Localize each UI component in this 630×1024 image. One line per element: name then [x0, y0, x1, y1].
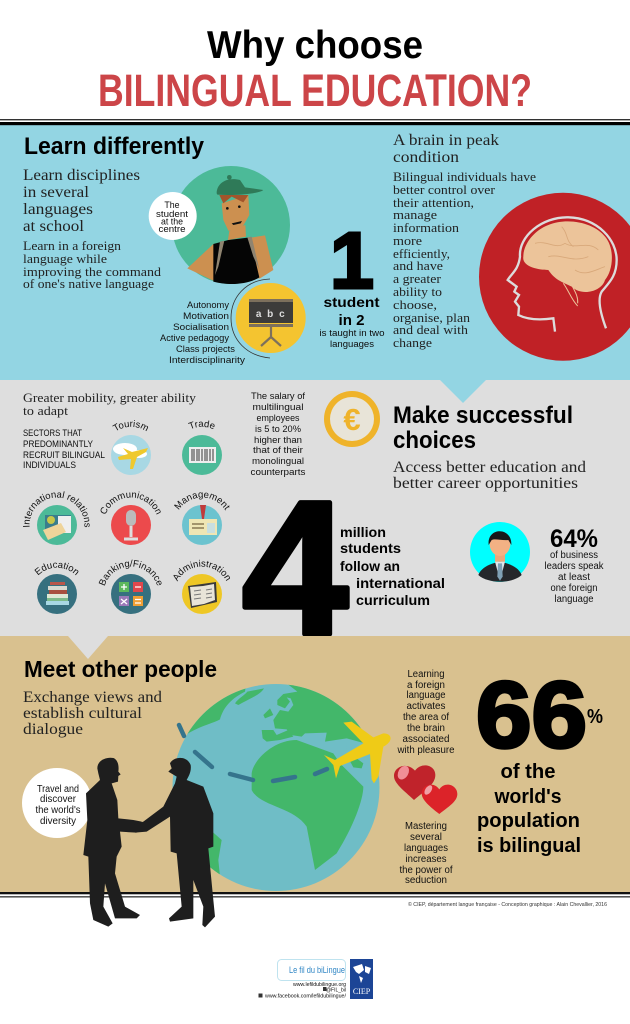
text block: salary: The salary of	[251, 391, 305, 402]
panel: learn differently	[0, 122, 630, 380]
logo: le fil du bilingue: Le fil du biLingue	[289, 965, 345, 975]
arrow: blue pointer	[440, 380, 486, 403]
text block: learn disciplines: at school	[23, 218, 84, 235]
text block: access better education: better career opportunities	[393, 475, 578, 492]
panel: make successful choices	[0, 380, 630, 675]
text block: brain in peak condition: choose,	[393, 297, 437, 312]
text block: brain in peak condition: efficiently,	[393, 246, 450, 261]
icon: administration	[174, 560, 230, 614]
callout: the student at the centre	[149, 192, 197, 240]
icon: trade: Trade	[188, 420, 215, 429]
text block: pedagogy list: Class projects	[176, 344, 235, 355]
text block: salary: is 5 to 20%	[255, 424, 302, 435]
logo: CIEP	[350, 959, 373, 999]
icon: education: Education	[34, 562, 78, 576]
text block: brain in peak condition: better control over	[393, 182, 496, 197]
stat: 64 percent: at least	[558, 572, 590, 583]
text block: exchange views	[23, 689, 162, 738]
icon: trade	[182, 420, 222, 475]
text block: pedagogy list	[160, 300, 245, 366]
text block: learn disciplines: improving the command	[23, 264, 162, 279]
stat: 66 percent: is bilingual	[477, 835, 581, 857]
icon: blackboard: a b c	[256, 309, 286, 320]
icon: globe	[172, 684, 380, 891]
text block: pleasure: activates	[406, 701, 446, 712]
stat: 66 percent: %	[587, 706, 603, 728]
arrow: grey pointer	[68, 636, 108, 659]
text block: seduction: seduction	[405, 875, 447, 886]
icon: blackboard	[231, 279, 306, 358]
stat: 64 percent	[544, 525, 604, 605]
credit line: © CIEP, département langue française - Conception graphique : Alain Chevallier, 2016	[408, 901, 607, 908]
text block: brain in peak condition: Bilingual individuals have	[393, 169, 536, 184]
text block: pedagogy list: Interdisciplinarity	[169, 355, 245, 366]
icon: tourism	[111, 420, 151, 475]
text block: sectors	[23, 428, 105, 470]
text block: learn disciplines: Learn disciplines	[23, 167, 140, 184]
stat: 64 percent: 64%	[550, 525, 598, 553]
icon: international relations	[23, 491, 90, 545]
text block: seduction	[400, 821, 453, 886]
callout: the student at the centre: student	[156, 209, 189, 219]
callout: travel and discover: the world's	[36, 805, 81, 816]
text block: pleasure: the area of	[403, 712, 449, 723]
links	[258, 982, 347, 1000]
text block: brain in peak condition: and have	[393, 258, 443, 273]
icon: education	[34, 562, 78, 614]
title	[98, 24, 532, 116]
logo: le fil du bilingue	[278, 960, 346, 980]
icon: euro coin	[324, 391, 380, 447]
text block: sectors: PREDOMINANTLY	[23, 439, 93, 449]
text block: seduction: Mastering	[405, 821, 447, 832]
stat: 64 percent: of business	[550, 550, 598, 561]
text block: pleasure: with pleasure	[397, 745, 455, 756]
stat: 1 student in 2: 1	[330, 216, 374, 305]
text block: salary: that of their	[253, 445, 303, 456]
stat: 64 percent: leaders speak	[544, 561, 604, 572]
text block: pedagogy list: Active pedagogy	[160, 333, 229, 344]
text block: sectors: SECTORS THAT	[23, 428, 82, 438]
heading: meet other people: Meet other people	[24, 656, 217, 682]
icon: management	[174, 492, 230, 545]
stat: 4 million students: million	[340, 524, 386, 540]
stat: 66 percent: population	[477, 810, 580, 832]
text block: learn disciplines: language while	[23, 251, 107, 266]
text block: pedagogy list: Motivation	[183, 311, 229, 322]
stat: 1 student in 2: languages	[330, 339, 375, 349]
text block: brain in peak condition: and deal with	[393, 322, 469, 337]
text block: brain in peak condition: more	[393, 233, 422, 248]
icon: business leader	[470, 522, 530, 582]
text block: exchange views: establish cultural	[23, 705, 142, 722]
stat: 66 percent	[476, 662, 603, 857]
text block: pedagogy list: Autonomy	[187, 300, 229, 311]
callout: travel and discover: discover	[40, 794, 77, 805]
heading: make successful choices	[393, 402, 573, 454]
icon: banking finance	[98, 560, 162, 614]
icon: plane	[324, 722, 391, 783]
icon: communication	[100, 492, 161, 545]
heading: make successful choices: Make successful	[393, 402, 573, 429]
links: www.facebook.com/lefildubilingue/	[265, 994, 347, 1000]
icon: student	[172, 166, 290, 284]
text block: brain in peak condition: condition	[393, 149, 459, 166]
text block: learn disciplines: languages	[23, 201, 93, 218]
icon: euro coin: €	[343, 402, 361, 437]
heading: learn differently: Learn differently	[24, 133, 204, 160]
text block: salary	[250, 391, 306, 478]
text block: salary: counterparts	[250, 467, 306, 478]
callout: travel and discover: Travel and	[37, 784, 79, 795]
text block: pedagogy list: Socialisation	[173, 322, 229, 333]
text block: seduction: increases	[406, 854, 447, 865]
stat: 66 percent: world's	[494, 786, 562, 808]
text block: learn disciplines	[23, 167, 162, 291]
text block: sectors: INDIVIDUALS	[23, 460, 76, 470]
illustration: handshake silhouettes	[83, 758, 215, 927]
stat: 1 student in 2: is taught in two	[320, 328, 384, 338]
stat: 1 student in 2: in 2	[338, 313, 364, 329]
stat: 64 percent: one foreign	[550, 583, 598, 594]
text block: brain in peak condition: information	[393, 220, 460, 235]
stat: 1 student in 2	[320, 216, 384, 349]
callout: travel and discover: diversity	[40, 816, 76, 827]
text block: salary: employees	[256, 413, 300, 424]
stat: 4 million students: students	[340, 540, 401, 556]
text block: sectors: RECRUIT BILINGUAL	[23, 450, 105, 460]
callout: the student at the centre: centre	[158, 224, 186, 234]
text block: pleasure	[397, 669, 455, 756]
icon: communication: Communication	[100, 492, 161, 514]
stat: 4 million students: curriculum	[356, 592, 430, 608]
text block: salary: higher than	[254, 435, 302, 446]
icon: brain in head	[479, 193, 630, 361]
stat: 4 million students	[242, 462, 445, 675]
text block: greater mobility: to adapt	[23, 403, 68, 418]
panel: meet other people	[0, 636, 630, 894]
text block: learn disciplines: Learn in a foreign	[23, 238, 122, 253]
text block: brain in peak condition: ability to	[393, 284, 442, 299]
text block: seduction: the power of	[400, 865, 453, 876]
stat: 1 student in 2: student	[324, 295, 380, 310]
bottom rule	[0, 892, 630, 894]
text block: seduction: languages	[404, 843, 448, 854]
text block: salary: multilingual	[252, 402, 304, 413]
logo: CIEP: CIEP	[353, 987, 371, 996]
stat: 66 percent: of the	[500, 761, 556, 783]
text block: seduction: several	[410, 832, 442, 843]
text block: exchange views: Exchange views and	[23, 689, 162, 706]
text block: salary: monolingual	[252, 456, 304, 467]
title: BILINGUAL EDUCATION?	[98, 65, 532, 116]
text block: brain in peak condition: manage	[393, 207, 437, 222]
links: @FIL_bil	[326, 988, 346, 994]
text block: pleasure: Learning	[408, 669, 444, 680]
text block: exchange views: dialogue	[23, 721, 83, 738]
icon: international relations: International relations	[23, 491, 90, 528]
callout: the student at the centre: at the	[161, 216, 183, 226]
text block: brain in peak condition: A brain in peak	[393, 132, 499, 149]
stat: 66 percent: 66	[476, 662, 587, 767]
text block: pleasure: language	[406, 690, 446, 701]
icon: tourism: Tourism	[112, 420, 148, 432]
text block: learn disciplines: in several	[23, 184, 89, 201]
icon: administration: Administration	[174, 560, 230, 582]
stat: 4 million students: follow an	[340, 558, 400, 574]
text block: access better education: Access better education and	[393, 459, 586, 476]
text block: pleasure: the brain	[407, 723, 445, 734]
callout: travel and discover	[22, 768, 92, 838]
text block: brain in peak condition: change	[393, 335, 432, 350]
links: www.lefildubilingue.org	[293, 982, 346, 988]
icon: banking finance: Banking/Finance	[98, 560, 162, 586]
heading: make successful choices: choices	[393, 427, 476, 454]
callout: the student at the centre: The	[164, 200, 180, 210]
text block: access better education	[393, 459, 586, 492]
icon: hearts	[394, 764, 457, 814]
title: Why choose	[207, 24, 423, 67]
text block: brain in peak condition: their attention,	[393, 195, 474, 210]
text block: pleasure: associated	[402, 734, 450, 745]
stat: 4 million students: international	[356, 575, 445, 591]
stat: 64 percent: language	[554, 594, 594, 605]
text block: learn disciplines: of one's native language	[23, 276, 154, 291]
icon: management: Management	[174, 492, 230, 510]
text block: brain in peak condition: a greater	[393, 271, 442, 286]
text block: pleasure: a foreign	[407, 680, 445, 691]
text block: greater mobility: Greater mobility, greater ability	[23, 390, 197, 405]
text block: brain in peak condition	[393, 132, 536, 350]
text block: greater mobility	[23, 390, 197, 418]
stat: 4 million students: 4	[242, 462, 348, 675]
text block: brain in peak condition: organise, plan	[393, 310, 471, 325]
